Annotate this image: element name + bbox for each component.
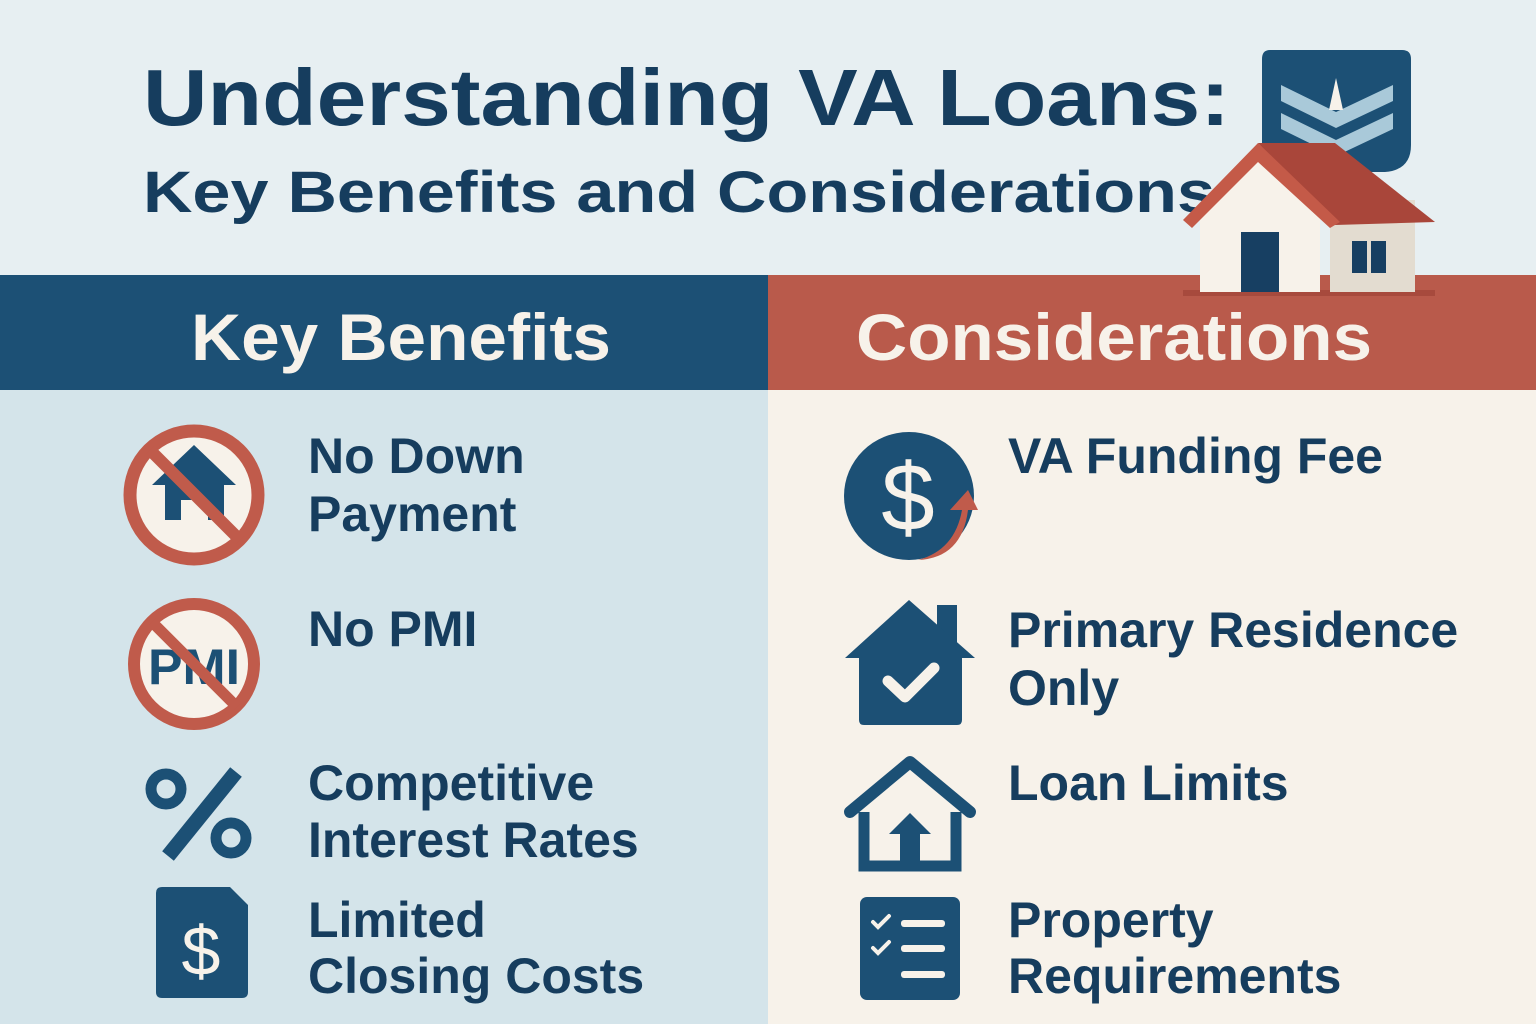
icon: no down payment — [130, 431, 258, 559]
title: Key Benefits and Considerations — [143, 160, 1215, 225]
text: VA funding fee: VA Funding Fee — [1008, 428, 1383, 484]
text: property requirements: Requirements — [1008, 948, 1341, 1004]
text: no down payment: No Down — [308, 428, 525, 484]
icon: no PMI: PMI — [148, 639, 240, 695]
icon: dollar with arrow: $ — [881, 444, 935, 551]
icon: house with up arrow — [850, 762, 970, 866]
header bar: key benefits — [0, 275, 768, 390]
text: primary residence only — [1008, 602, 1458, 716]
text: primary residence only: Only — [1008, 660, 1119, 716]
icon: shield with chevrons — [1262, 50, 1411, 172]
icon: percent — [151, 772, 246, 856]
text: competitive interest rates — [308, 755, 639, 868]
text: no PMI: No PMI — [308, 601, 477, 657]
icon: no PMI — [134, 604, 254, 724]
icon: house with check — [845, 600, 975, 725]
icon: dollar document — [156, 887, 248, 998]
text: competitive interest rates: Interest Rates — [308, 812, 639, 868]
title — [143, 53, 1230, 225]
header bar: key benefits: Key Benefits — [191, 300, 611, 374]
title: Understanding VA Loans: — [143, 53, 1230, 142]
icon: house illustration — [1183, 143, 1435, 296]
text: loan limits: Loan Limits — [1008, 755, 1289, 811]
text: primary residence only: Primary Residence — [1008, 602, 1458, 658]
icon: checklist — [860, 897, 960, 1000]
icon: dollar with arrow — [844, 432, 978, 560]
icon: dollar document: $ — [182, 912, 220, 990]
text: competitive interest rates: Competitive — [308, 755, 594, 811]
header bar: considerations: Considerations — [856, 300, 1372, 374]
header bar: considerations — [768, 275, 1536, 390]
text: property requirements: Property — [1008, 892, 1214, 948]
text: limited closing costs: Limited — [308, 892, 486, 948]
text: no down payment — [308, 428, 525, 542]
text: limited closing costs: Closing Costs — [308, 948, 644, 1004]
text: no down payment: Payment — [308, 486, 517, 542]
text: property requirements — [1008, 892, 1341, 1004]
text: limited closing costs — [308, 892, 644, 1004]
